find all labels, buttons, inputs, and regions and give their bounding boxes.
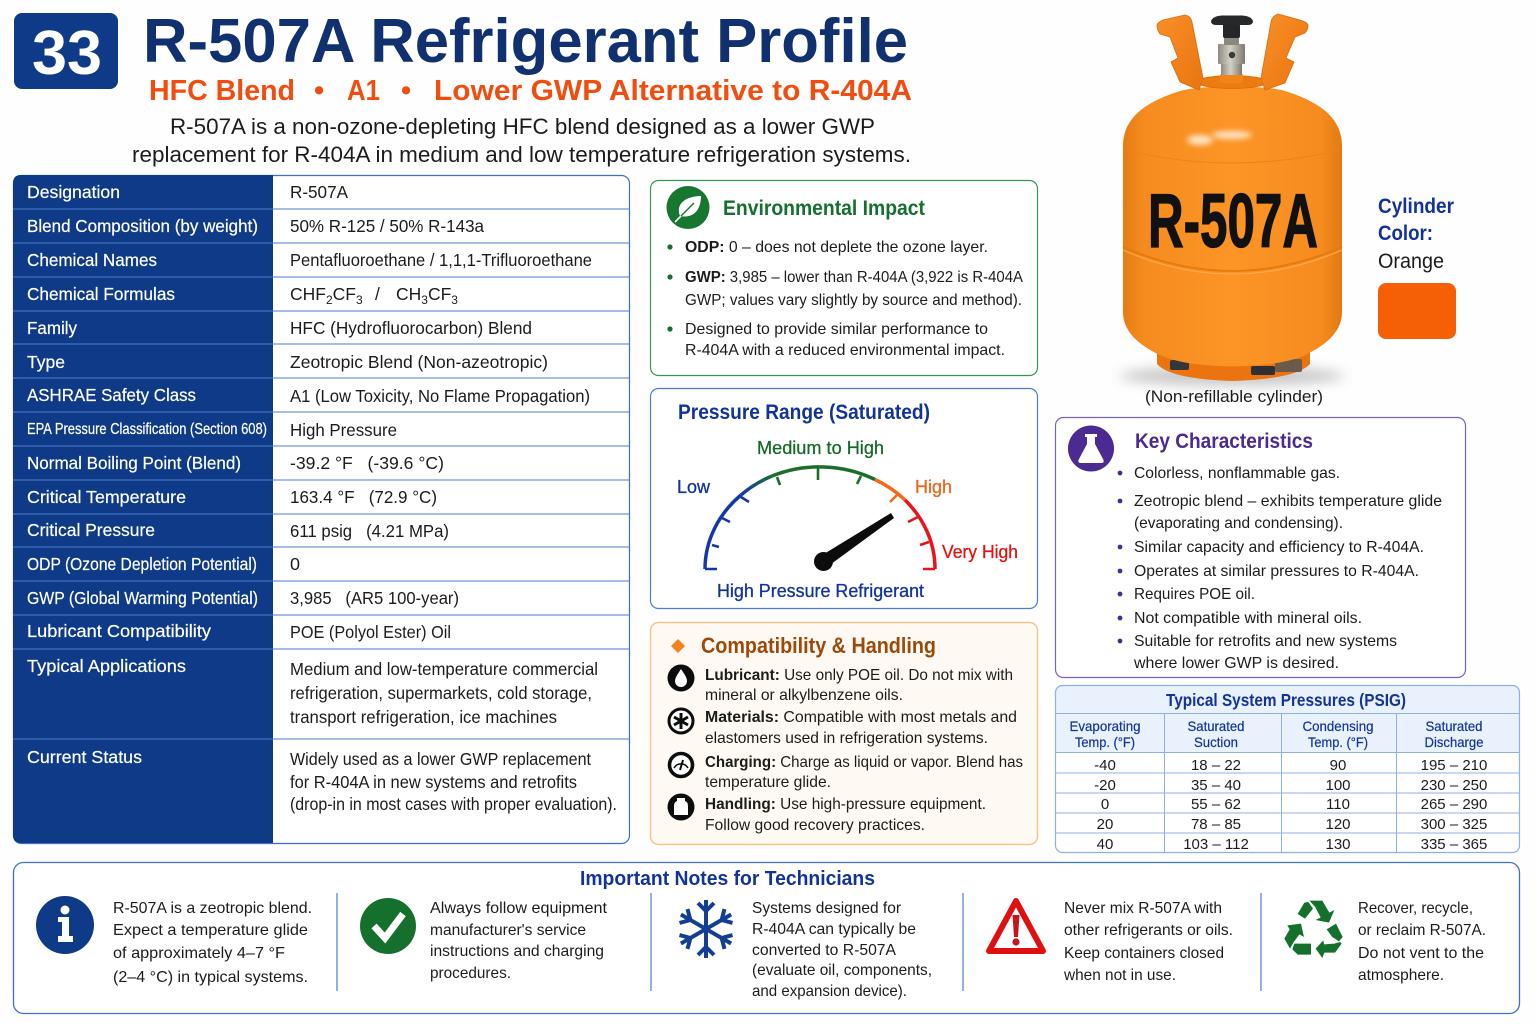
row: critical temperature <box>27 487 437 507</box>
intro text: R-507A is a non-ozone-depleting HFC blend designed as a lower GWP <box>170 114 875 139</box>
number badge: 33 <box>32 19 102 88</box>
row: chemical names: Chemical Names <box>27 250 157 270</box>
column headers: Saturated <box>1188 718 1244 734</box>
subtitle: • <box>314 75 324 107</box>
row: blend composition: Blend Composition (by weight) <box>27 216 258 236</box>
row: chemical formulas: 3 <box>421 293 428 307</box>
note: recover: or reclaim R-507A. <box>1358 922 1486 939</box>
icon: diamond <box>671 639 685 653</box>
bullet list: environmental points <box>667 239 1023 359</box>
icon: materials <box>669 709 693 733</box>
note: recover: atmosphere. <box>1358 967 1444 984</box>
row: gwp: GWP (Global Warming Potential) <box>27 588 258 608</box>
panel: key characteristics <box>1056 418 1466 678</box>
note: never mix: Keep containers closed <box>1064 945 1224 962</box>
row: chemical formulas <box>27 284 458 307</box>
subtitle: A1 <box>347 75 380 107</box>
table title: Typical System Pressures (PSIG) <box>1166 690 1406 710</box>
row: blend composition <box>27 216 484 236</box>
panel: environmental impact <box>650 180 1038 376</box>
row: ashrae safety class: ASHRAE Safety Class <box>27 385 196 405</box>
table rows: -20 <box>1094 777 1116 794</box>
note: follow manufacturer <box>430 900 608 982</box>
row: ashrae safety class <box>27 385 590 406</box>
text: handling <box>705 796 986 834</box>
note: never mix <box>1063 900 1233 984</box>
row: normal boiling point: Normal Boiling Point (Blend) <box>27 453 241 473</box>
table rows <box>1094 757 1487 853</box>
row: designation: Designation <box>27 182 120 202</box>
table rows: 78 – 85 <box>1191 816 1241 833</box>
row: critical temperature: Critical Temperature <box>27 487 186 507</box>
table rows: 195 – 210 <box>1421 757 1487 774</box>
row: epa classification: High Pressure <box>290 420 397 440</box>
note: recover: Do not vent to the <box>1358 945 1484 962</box>
note: zeotropic glide: (2–4 °C) in typical systems. <box>113 969 308 986</box>
cylinder base ring <box>1157 352 1310 381</box>
icon: info <box>36 896 94 954</box>
cylinder color legend: Cylinder <box>1378 195 1454 218</box>
cylinder color legend <box>1378 195 1456 339</box>
row: typical applications: Typical Applications <box>27 656 186 676</box>
intro text <box>132 114 911 167</box>
table rows: 103 – 112 <box>1183 836 1249 853</box>
icon: recycle <box>1284 901 1343 958</box>
bullet list: environmental points: ODP: 0 – does not deplete the ozone layer. <box>685 239 988 256</box>
row: chemical formulas: CHF <box>290 284 326 304</box>
icon: warning triangle <box>989 901 1043 951</box>
row: critical temperature: 163.4 °F (72.9 °C) <box>290 487 437 507</box>
text: materials: elastomers used in refrigeration systems. <box>705 730 988 747</box>
bullet list: characteristics: Requires POE oil. <box>1134 586 1255 603</box>
bullet list: characteristics: Colorless, nonflammable gas. <box>1134 465 1340 482</box>
cylinder color legend: Color: <box>1378 222 1433 245</box>
column headers: Saturated <box>1426 718 1482 734</box>
subtitle <box>149 75 912 107</box>
row: family: Family <box>27 318 77 338</box>
column headers: Evaporating <box>1070 718 1140 734</box>
heading: environmental impact: Environmental Impact <box>723 197 925 220</box>
row: gwp: 3,985 (AR5 100-year) <box>290 588 459 608</box>
row: current status: (drop-in in most cases with proper evaluation). <box>290 794 617 814</box>
subtitle: Lower GWP Alternative to R-404A <box>434 75 912 107</box>
column headers: Temp. (°F) <box>1075 734 1135 750</box>
row: chemical formulas: CF <box>428 284 451 304</box>
table rows: 55 – 62 <box>1191 796 1241 813</box>
cylinder body <box>1123 86 1342 366</box>
note: retrofit: Systems designed for <box>752 900 902 917</box>
row: chemical formulas: 3 <box>451 293 458 307</box>
gauge label: low: Low <box>677 477 711 497</box>
bullet list: characteristics: (evaporating and condensing). <box>1134 515 1343 532</box>
bullet list: characteristics: Operates at similar pressures to R-404A. <box>1134 563 1419 580</box>
title: R-507A Refrigerant Profile <box>143 7 908 76</box>
row: epa classification: EPA Pressure Classification (Section 608) <box>27 421 267 438</box>
row: critical pressure <box>27 520 449 541</box>
text: handling: Follow good recovery practices. <box>705 817 925 834</box>
gauge label: medium to high: Medium to High <box>757 438 884 458</box>
bullet list: environmental points: GWP: 3,985 – lower than R-404A (3,922 is R-404A <box>685 269 1023 286</box>
table rows: 300 – 325 <box>1421 816 1487 833</box>
row: chemical formulas: Chemical Formulas <box>27 284 175 304</box>
icon: snowflake <box>677 900 735 958</box>
cylinder handles <box>1157 14 1308 90</box>
table rows: 120 <box>1325 816 1351 833</box>
row: gwp <box>27 588 459 608</box>
row: normal boiling point: -39.2 °F (-39.6 °C) <box>290 453 444 473</box>
subtitle: • <box>401 75 411 107</box>
row: chemical formulas: CF <box>333 284 356 304</box>
table rows: 130 <box>1325 836 1351 853</box>
row: blend composition: 50% R-125 / 50% R-143a <box>290 216 484 236</box>
column headers: Temp. (°F) <box>1308 734 1368 750</box>
text: charging <box>705 754 1023 791</box>
row: current status: Widely used as a lower GWP replacement <box>290 749 591 769</box>
note: follow manufacturer: procedures. <box>430 965 511 982</box>
icon: lubricant drop <box>668 664 694 692</box>
row: family <box>27 318 532 338</box>
row: typical applications: transport refrigeration, ice machines <box>290 707 557 727</box>
note: retrofit: converted to R-507A <box>752 942 896 959</box>
row: chemical formulas: 3 <box>356 293 363 307</box>
cylinder color legend: Orange <box>1378 250 1444 273</box>
row: normal boiling point <box>27 453 444 473</box>
panel: typical system pressures table <box>1055 685 1520 853</box>
row: critical pressure: 611 psig (4.21 MPa) <box>290 521 449 541</box>
column headers: Discharge <box>1424 734 1484 750</box>
icon: check mark <box>360 898 416 954</box>
intro text: replacement for R-404A in medium and low temperature refrigeration systems. <box>132 142 911 167</box>
table rows: 0 <box>1101 796 1109 813</box>
note: retrofit: (evaluate oil, components, <box>752 962 932 979</box>
column headers: Suction <box>1194 734 1238 750</box>
icon: charging gauge <box>670 754 692 776</box>
row: lubricant compatibility <box>27 621 451 642</box>
table rows: 100 <box>1325 777 1351 794</box>
table rows: 110 <box>1326 796 1350 813</box>
row: chemical names: Pentafluoroethane / 1,1,1-Trifluoroethane <box>290 250 592 270</box>
cylinder neck and valve <box>1197 16 1267 88</box>
panel: compatibility and handling <box>650 622 1038 844</box>
row: chemical formulas: CH <box>396 284 421 304</box>
bullet list: environmental points: GWP; values vary slightly by source and method). <box>685 292 1022 309</box>
column headers: Condensing <box>1302 718 1374 734</box>
note: zeotropic glide: R-507A is a zeotropic blend. <box>113 900 312 917</box>
icon: handling bottle <box>668 794 694 820</box>
table rows: 90 <box>1330 757 1346 774</box>
bullet list: characteristics <box>1118 465 1442 672</box>
row: ashrae safety class: A1 (Low Toxicity, No Flame Propagation) <box>290 386 590 406</box>
bullet list: characteristics: Not compatible with mineral oils. <box>1134 610 1362 627</box>
row: family: HFC (Hydrofluorocarbon) Blend <box>290 318 532 338</box>
table rows: 265 – 290 <box>1421 796 1487 813</box>
note: never mix: when not in use. <box>1063 967 1176 984</box>
row: critical pressure: Critical Pressure <box>27 520 155 540</box>
note: follow manufacturer: Always follow equipment <box>430 900 608 917</box>
panel: important notes for technicians <box>14 862 1520 1014</box>
heading: key characteristics: Key Characteristics <box>1135 430 1313 453</box>
number badge <box>14 13 118 89</box>
table rows: 40 <box>1097 836 1113 853</box>
note: never mix: other refrigerants or oils. <box>1064 922 1233 939</box>
row: typical applications: refrigeration, supermarkets, cold storage, <box>290 683 592 703</box>
note: retrofit <box>752 900 932 1000</box>
row: current status <box>27 747 617 814</box>
row: lubricant compatibility: POE (Polyol Ester) Oil <box>290 622 451 642</box>
text: lubricant: Lubricant: Use only POE oil. Do not mix with <box>705 667 1013 684</box>
panel: properties table <box>13 175 630 844</box>
subtitle: HFC Blend <box>149 75 295 107</box>
row: type: Zeotropic Blend (Non-azeotropic) <box>290 352 548 372</box>
text: lubricant: mineral or alkylbenzene oils. <box>705 687 903 704</box>
note: recover: Recover, recycle, <box>1358 900 1473 917</box>
note: zeotropic glide: Expect a temperature glide <box>113 922 308 939</box>
column headers <box>1070 718 1484 750</box>
note: follow manufacturer: instructions and charging <box>430 943 604 960</box>
text: materials: Materials: Compatible with most metals and <box>705 709 1017 726</box>
bullet list: characteristics: Suitable for retrofits and new systems <box>1134 633 1397 650</box>
row: typical applications <box>27 656 598 727</box>
text: charging: temperature glide. <box>705 774 831 791</box>
row: type: Type <box>27 352 65 372</box>
row: chemical names <box>27 250 592 270</box>
table rows: 335 – 365 <box>1421 836 1487 853</box>
gauge label: high: High <box>915 477 952 497</box>
heading: important notes: Important Notes for Technicians <box>580 868 875 890</box>
row: typical applications: Medium and low-temperature commercial <box>290 659 598 679</box>
table rows: -40 <box>1094 757 1116 774</box>
table rows: 18 – 22 <box>1191 757 1241 774</box>
note: zeotropic glide <box>113 900 312 986</box>
note: never mix: Never mix R-507A with <box>1064 900 1222 917</box>
text: handling: Handling: Use high-pressure equipment. <box>705 796 986 813</box>
gauge label: very high: Very High <box>942 542 1018 562</box>
bullet list: characteristics: where lower GWP is desired. <box>1133 655 1339 672</box>
heading: pressure range: Pressure Range (Saturated) <box>678 401 930 424</box>
gauge needle <box>814 513 894 571</box>
row: odp: 0 <box>290 554 300 574</box>
gauge dial <box>705 467 935 569</box>
panel: pressure range <box>650 388 1038 608</box>
note: follow manufacturer: manufacturer's service <box>430 922 586 939</box>
color swatch <box>1378 283 1456 339</box>
bullet list: environmental points: Designed to provide similar performance to <box>685 321 988 338</box>
cylinder label: R-507A <box>1148 179 1318 264</box>
row: current status: Current Status <box>27 747 142 767</box>
text: charging: Charging: Charge as liquid or vapor. Blend has <box>705 754 1023 771</box>
gauge caption: High Pressure Refrigerant <box>717 581 924 601</box>
bullet list: environmental points: R-404A with a reduced environmental impact. <box>685 342 1005 359</box>
row: epa classification <box>27 420 397 440</box>
text: materials <box>705 709 1017 747</box>
row: designation: R-507A <box>290 182 348 202</box>
heading: compatibility and handling: Compatibility & Handling <box>701 633 936 658</box>
note: recover <box>1358 900 1486 984</box>
table rows: 230 – 250 <box>1421 777 1487 794</box>
row: chemical formulas: 2 <box>326 293 333 307</box>
row: lubricant compatibility: Lubricant Compatibility <box>27 621 211 641</box>
row: chemical formulas: / <box>375 284 380 304</box>
note: retrofit: and expansion device). <box>752 983 907 1000</box>
text: lubricant <box>705 667 1013 704</box>
icon: leaf <box>666 186 710 229</box>
note: retrofit: R-404A can typically be <box>752 921 916 938</box>
row: current status: for R-404A in new systems and retrofits <box>290 772 577 792</box>
table rows: 35 – 40 <box>1191 777 1241 794</box>
cylinder illustration <box>1120 14 1344 386</box>
note: zeotropic glide: of approximately 4–7 °F <box>113 945 285 962</box>
row: odp: ODP (Ozone Depletion Potential) <box>27 554 257 574</box>
cylinder caption: (Non-refillable cylinder) <box>1145 387 1323 406</box>
row: designation <box>27 182 348 202</box>
bullet list: characteristics: Zeotropic blend – exhibits temperature glide <box>1134 493 1442 510</box>
icon: flask <box>1068 426 1114 472</box>
row: type <box>27 352 548 372</box>
table rows: 20 <box>1097 816 1113 833</box>
bullet list: characteristics: Similar capacity and efficiency to R-404A. <box>1134 539 1424 556</box>
